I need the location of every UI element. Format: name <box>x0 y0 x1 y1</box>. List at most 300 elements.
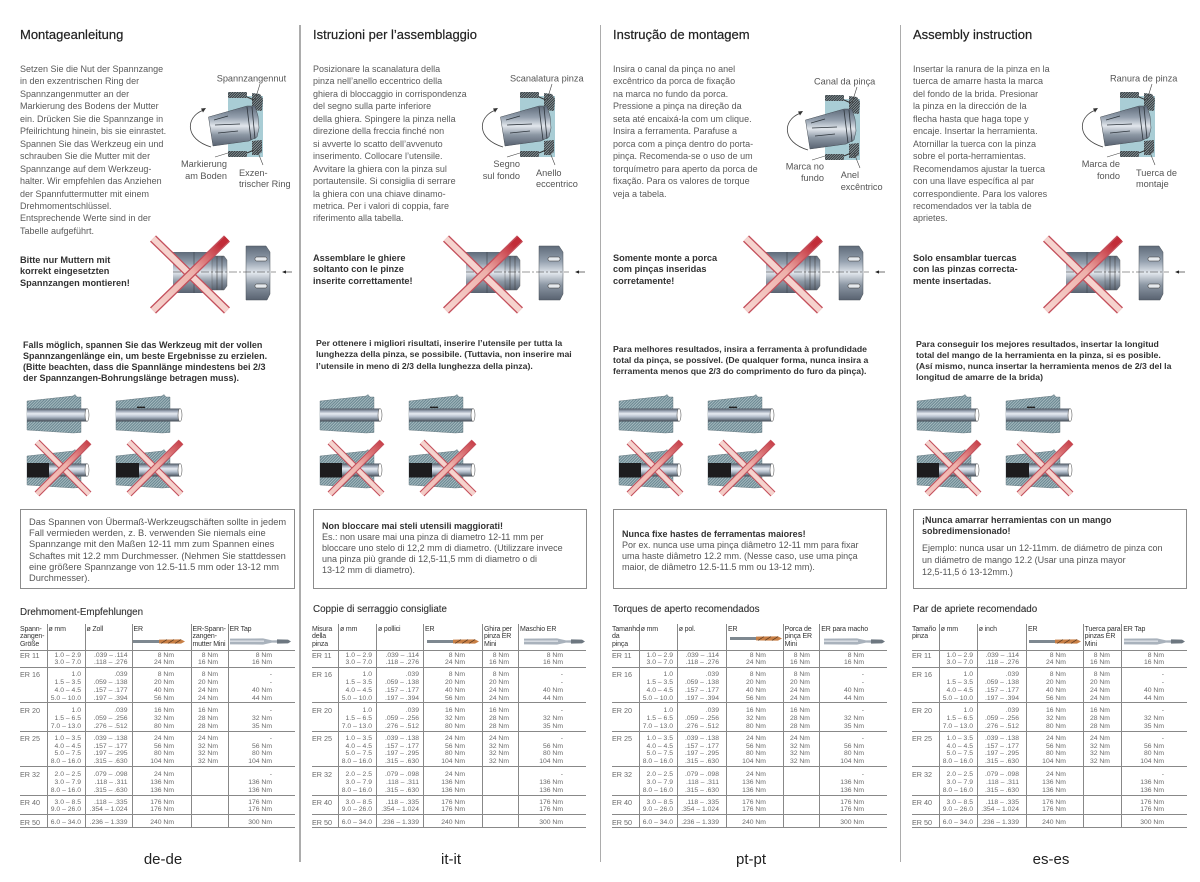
text block: instructions: pinça. Recomenda-se o uso de um <box>613 151 753 161</box>
warning text: soltanto con le pinze <box>313 264 404 274</box>
text block: instructions: Avvitare la ghiera con la pinza sul <box>313 164 447 174</box>
table: torque recommendations: 24 Nm <box>790 695 810 702</box>
table: torque recommendations: 1.5 – 6.5 <box>647 715 673 722</box>
table: torque recommendations: 24 Nm <box>198 687 218 694</box>
table: torque recommendations: 136 Nm <box>150 787 174 794</box>
illustration: collet in nut with labels: Markierung <box>181 159 227 169</box>
illustration: collet sections, correct and crossed out <box>320 394 476 496</box>
table: torque recommendations: 32 Nm <box>198 743 218 750</box>
text block: clamping length note: total da pinça, se possível. (De qualquer forma, nunca insira a <box>613 355 868 365</box>
table: torque recommendations: - <box>862 735 864 742</box>
table: torque recommendations: 8.0 – 16.0 <box>943 787 973 794</box>
table: torque recommendations: ER para macho <box>821 626 868 632</box>
table: torque recommendations: 8 Nm <box>750 671 766 678</box>
table: torque recommendations: ER 25 <box>20 734 40 743</box>
text block: instructions: Spannen Sie das Werkzeug ein und <box>20 139 163 149</box>
table: torque recommendations <box>312 624 586 828</box>
table: torque recommendations: 8.0 – 16.0 <box>51 787 81 794</box>
text block: clamping length note: Spannzangenlänge ein, um beste Ergebnisse zu erzielen. <box>23 351 267 361</box>
table: torque recommendations: - <box>1162 707 1164 714</box>
table: torque recommendations: ER 32 <box>20 770 40 779</box>
table: torque recommendations: 16 Nm <box>790 707 810 714</box>
table: torque recommendations: 1.5 – 6.5 <box>947 715 973 722</box>
table: torque recommendations: 1.0 <box>664 707 673 714</box>
table: torque recommendations: 1.5 – 6.5 <box>346 715 372 722</box>
table: torque recommendations: ER 40 <box>612 798 632 807</box>
panel: de-de <box>20 27 295 868</box>
table: torque recommendations: 24 Nm <box>489 735 509 742</box>
table: torque recommendations: 3.0 – 7.9 <box>947 779 973 786</box>
table: torque recommendations: ER 50 <box>312 818 332 827</box>
callout box: oversized shanks: Das Spannen von Übermaß-Werkzeugschäften sollte in jedem <box>29 517 286 527</box>
text block: instructions: torquímetro para aperto da porca de <box>613 164 758 174</box>
table: torque recommendations: 24 Nm <box>746 659 766 666</box>
table: torque recommendations: ER 16 <box>912 670 932 679</box>
text block: clamping length note: Para conseguir los mejores resultados, insertar la longitud <box>916 338 1159 348</box>
table: torque recommendations: .059 – .256 <box>93 715 128 722</box>
table: torque recommendations: 40 Nm <box>1046 687 1066 694</box>
table: torque recommendations <box>20 624 295 828</box>
table: torque recommendations: .157 – .177 <box>685 743 719 750</box>
table: torque recommendations: Porca de <box>785 626 812 632</box>
table: torque recommendations: 176 Nm <box>742 806 766 813</box>
table: torque recommendations: Mini <box>484 641 496 648</box>
table: torque recommendations: 8 Nm <box>493 671 509 678</box>
table: torque recommendations: 8 Nm <box>848 652 864 659</box>
icon: tap <box>524 638 585 645</box>
table: torque recommendations: ER 20 <box>20 706 40 715</box>
table: torque recommendations: 300 Nm <box>840 819 864 826</box>
table: torque recommendations: 8 Nm <box>750 652 766 659</box>
illustration: collet in nut with labels: Tuerca de <box>1136 168 1177 178</box>
table: torque recommendations: .118 – .311 <box>386 779 419 786</box>
table: torque recommendations: .236 – 1.339 <box>981 819 1019 826</box>
table: torque recommendations: 9.0 – 26.0 <box>342 806 372 813</box>
table: torque recommendations: .059 – .138 <box>93 679 128 686</box>
table: torque recommendations: Ghira per <box>484 626 512 632</box>
table: torque recommendations: 1.0 <box>363 707 372 714</box>
table: torque recommendations: 80 Nm <box>543 750 563 757</box>
table: torque recommendations: 16 Nm <box>746 707 766 714</box>
table: torque recommendations: 24 Nm <box>746 771 766 778</box>
table: torque recommendations: Tamaño <box>912 626 936 632</box>
table: torque recommendations: 28 Nm <box>198 715 218 722</box>
text block: instructions: veja a tabela. <box>613 189 667 199</box>
table: torque recommendations: .276 – .512 <box>985 723 1019 730</box>
table: torque recommendations: 1.5 – 3.5 <box>647 679 673 686</box>
table: torque recommendations: ER 40 <box>312 798 332 807</box>
text block: clamping length note: Para melhores resultados, insira a ferramenta à profundidade <box>613 344 867 354</box>
table: torque recommendations: 104 Nm <box>1042 758 1066 765</box>
callout box: oversized shanks: eine größere Spannzange von 12.5-11.5 mm oder 13-12 mm <box>29 562 279 572</box>
table: torque recommendations: 104 Nm <box>742 758 766 765</box>
table: torque recommendations: 3.0 – 7.9 <box>346 779 372 786</box>
table: torque recommendations: Misura <box>312 626 332 632</box>
table: torque recommendations: .118 – .335 <box>385 799 419 806</box>
table: torque recommendations: pinza ER <box>484 633 511 640</box>
table: torque recommendations: pinza <box>312 641 328 648</box>
table: torque recommendations: ER 11 <box>912 651 931 660</box>
text block: instructions: excêntrico da porca de fixação <box>613 76 735 86</box>
table: torque recommendations: 5.0 – 7.5 <box>947 750 973 757</box>
table: torque recommendations: .039 <box>114 671 128 678</box>
table: torque recommendations: 136 Nm <box>1140 787 1164 794</box>
table: torque recommendations: 104 Nm <box>441 758 465 765</box>
table: torque recommendations: 28 Nm <box>489 715 509 722</box>
table: torque recommendations: 240 Nm <box>742 819 766 826</box>
table: torque recommendations: ER 25 <box>912 734 932 743</box>
callout box: oversized shanks: Por ex. nunca use uma pinça diâmetro 12-11 mm para fixar <box>622 540 858 550</box>
table: torque recommendations: 176 Nm <box>840 799 864 806</box>
text block: instructions: Posizionare la scanalatura della <box>313 64 440 74</box>
callout box: oversized shanks: ¡Nunca amarrar herramientas con un mango <box>922 514 1112 524</box>
table: torque recommendations: 136 Nm <box>150 779 174 786</box>
table: torque recommendations: 5.0 – 10.0 <box>943 695 973 702</box>
table: torque recommendations: 20 Nm <box>154 679 174 686</box>
table: torque recommendations: 300 Nm <box>539 819 563 826</box>
table: torque recommendations: pinzas ER <box>1085 633 1115 640</box>
table: torque recommendations: ER 20 <box>612 706 632 715</box>
table: torque recommendations: 32 Nm <box>1090 758 1110 765</box>
table: torque recommendations: 44 Nm <box>1144 695 1164 702</box>
table: torque recommendations: .039 <box>706 671 719 678</box>
illustration: collet in nut with labels <box>482 74 584 189</box>
table: torque recommendations: .039 <box>406 671 419 678</box>
table: torque recommendations: ER 16 <box>612 670 632 679</box>
table: torque recommendations: 24 Nm <box>445 659 465 666</box>
table: torque recommendations: mutter Mini <box>192 641 225 648</box>
table: torque recommendations: Tuerca para <box>1085 626 1121 632</box>
table: torque recommendations: .315 – .630 <box>93 758 128 765</box>
table: torque recommendations: 176 Nm <box>1042 799 1066 806</box>
table: torque recommendations: 24 Nm <box>445 735 465 742</box>
table: torque recommendations: 4.0 – 4.5 <box>346 743 372 750</box>
table: torque recommendations: .079 – .098 <box>385 771 419 778</box>
table: torque recommendations: 2.0 – 2.5 <box>947 771 973 778</box>
table: torque recommendations: 40 Nm <box>746 687 766 694</box>
table: torque recommendations: - <box>1162 771 1164 778</box>
table: torque recommendations: ER 25 <box>312 734 332 743</box>
table: torque recommendations: 1.0 <box>363 671 372 678</box>
text block: clamping length note: total del mango de la herramienta en la pinza, si es posible. <box>916 350 1161 360</box>
table: torque recommendations: 176 Nm <box>441 799 465 806</box>
callout box: oversized shanks: uma haste diâmetro 12.2 mm. (Nesse caso, use uma pinça <box>622 551 858 561</box>
text block: instructions: la pinza en la dirección de la <box>913 101 1027 111</box>
heading: torque table: Torques de aperto recomendados <box>613 604 760 615</box>
illustration: collet in nut with labels: Marca de <box>1082 159 1120 169</box>
text block: instructions: flecha hasta que haga tope y <box>913 114 1029 124</box>
table: torque recommendations: - <box>862 679 864 686</box>
table: torque recommendations: - <box>1162 735 1164 742</box>
illustration: collet sections, correct and crossed out <box>618 394 776 496</box>
table: torque recommendations: 24 Nm <box>154 771 174 778</box>
table: torque recommendations: - <box>270 771 272 778</box>
warning text: inserite correttamente! <box>313 276 413 286</box>
table: torque recommendations: 8 Nm <box>1050 671 1066 678</box>
table: torque recommendations: 32 Nm <box>790 743 810 750</box>
title: Istruzioni per l'assemblaggio: Istruzioni per l’assemblaggio <box>313 27 477 42</box>
table: torque recommendations: 176 Nm <box>742 799 766 806</box>
table: torque recommendations: 32 Nm <box>154 715 174 722</box>
callout box: oversized shanks: Fall vermieden werden, z. B. verwenden Sie niemals eine <box>29 528 266 538</box>
table: torque recommendations: 5.0 – 10.0 <box>51 695 81 702</box>
warning text: Bitte nur Muttern mit <box>20 255 110 265</box>
text block: clamping length note <box>316 338 572 371</box>
table: torque recommendations: .315 – .630 <box>385 787 419 794</box>
text block: instructions: Insira a ferramenta. Parafuse a <box>613 126 737 136</box>
text block: instructions: Atornillar la tuerca con la pinza <box>913 139 1036 149</box>
table: torque recommendations: 104 Nm <box>1140 758 1164 765</box>
table: torque recommendations: .118 – .276 <box>385 659 419 666</box>
table: torque recommendations: ER 20 <box>912 706 932 715</box>
table: torque recommendations: 80 Nm <box>154 723 174 730</box>
table: torque recommendations: - <box>561 735 563 742</box>
text block: clamping length note <box>23 340 267 383</box>
table: torque recommendations: 24 Nm <box>154 659 174 666</box>
illustration: collet in nut with labels: sul fondo <box>483 171 520 181</box>
table: torque recommendations: 56 Nm <box>1046 743 1066 750</box>
table: torque recommendations: 24 Nm <box>1046 771 1066 778</box>
table: torque recommendations: .118 – .311 <box>94 779 128 786</box>
table: torque recommendations: 80 Nm <box>1144 750 1164 757</box>
text block: instructions: Pressione a pinça na direção da <box>613 101 742 111</box>
text block: instructions: si avverte lo scatto dell’avvenuto <box>313 139 443 149</box>
table: torque recommendations: 2.0 – 2.5 <box>346 771 372 778</box>
table: torque recommendations: 32 Nm <box>746 715 766 722</box>
table: torque recommendations: ø pollici <box>378 626 400 632</box>
text block: clamping length note: (Bitte beachten, dass die Spannlänge mindestens bei 2/3 <box>23 362 266 372</box>
table: torque recommendations: 24 Nm <box>1090 735 1110 742</box>
table: torque recommendations: 1.5 – 6.5 <box>55 715 81 722</box>
text block: instructions: schrauben Sie die Mutter mit der <box>20 151 150 161</box>
table: torque recommendations: 4.0 – 4.5 <box>346 687 372 694</box>
table: torque recommendations: 136 Nm <box>539 779 563 786</box>
table: torque recommendations: .276 – .512 <box>93 723 128 730</box>
table: torque recommendations: 44 Nm <box>252 695 272 702</box>
illustration: collet in nut with labels: Anello <box>536 168 562 178</box>
text block: instructions: encaje. Insertar la herramienta. <box>913 126 1038 136</box>
text block: instructions: Entsprechende Werte sind in der <box>20 213 151 223</box>
language code: es-es <box>1033 851 1069 868</box>
table: torque recommendations: 8 Nm <box>449 652 465 659</box>
table: torque recommendations: Mini <box>785 641 797 648</box>
table: torque recommendations: Tamanho <box>612 626 640 632</box>
table: torque recommendations: .039 <box>114 707 128 714</box>
table: torque recommendations: 32 Nm <box>1090 743 1110 750</box>
icon: drill <box>730 636 782 641</box>
table: torque recommendations: .354 – 1.024 <box>90 806 128 813</box>
illustration: collet in nut with labels: Exzen- <box>239 168 268 178</box>
table: torque recommendations: 24 Nm <box>489 687 509 694</box>
table: torque recommendations: 1.0 – 2.9 <box>346 652 372 659</box>
table: torque recommendations: ER-Spann- <box>192 626 226 632</box>
table: torque recommendations: .197 – .295 <box>385 750 419 757</box>
table: torque recommendations: 24 Nm <box>1090 687 1110 694</box>
table: torque recommendations: 240 Nm <box>150 819 174 826</box>
table: torque recommendations: 32 Nm <box>445 715 465 722</box>
table: torque recommendations: 136 Nm <box>441 787 465 794</box>
table: torque recommendations: .315 – .630 <box>685 787 719 794</box>
table: torque recommendations: 80 Nm <box>844 750 864 757</box>
warning text <box>313 253 413 286</box>
table: torque recommendations: 44 Nm <box>543 695 563 702</box>
table: torque recommendations: 32 Nm <box>790 758 810 765</box>
table: torque recommendations: ø mm <box>641 626 658 632</box>
table: torque recommendations: 28 Nm <box>198 723 218 730</box>
table: torque recommendations: 1.0 <box>664 671 673 678</box>
table: torque recommendations: 176 Nm <box>840 806 864 813</box>
panel: es-es <box>912 27 1187 868</box>
table: torque recommendations: .039 <box>406 707 419 714</box>
table: torque recommendations: 9.0 – 26.0 <box>943 806 973 813</box>
table: torque recommendations: 32 Nm <box>198 750 218 757</box>
table: torque recommendations: 16 Nm <box>543 659 563 666</box>
icon: drill <box>133 639 185 644</box>
table: torque recommendations: 176 Nm <box>1140 806 1164 813</box>
table: torque recommendations: 104 Nm <box>150 758 174 765</box>
callout box: oversized shanks: Schaftes mit 12.2 mm Durchmesser. (Nehmen Sie stattdessen <box>29 550 286 560</box>
table: torque recommendations: ER <box>425 626 434 632</box>
table: torque recommendations: .197 – .295 <box>685 750 719 757</box>
callout box: oversized shanks: Es.: non usare mai una pinza di diametro 12-11 mm per <box>322 532 543 542</box>
table: torque recommendations: 56 Nm <box>445 695 465 702</box>
table: torque recommendations: 16 Nm <box>844 659 864 666</box>
table: torque recommendations: .059 – .256 <box>385 715 419 722</box>
table: torque recommendations: 136 Nm <box>441 779 465 786</box>
text block: clamping length note: ferramenta menos que 2/3 do comprimento do furo da pinça). <box>613 366 866 376</box>
callout box: oversized shanks: un diámetro de mango 12.2 (Usar una pinza mayor <box>922 555 1126 565</box>
table: torque recommendations: ø Zoll <box>86 626 103 632</box>
table: torque recommendations: 136 Nm <box>742 779 766 786</box>
table: torque recommendations: 28 Nm <box>489 723 509 730</box>
table: torque recommendations: 9.0 – 26.0 <box>643 806 673 813</box>
table: torque recommendations: 5.0 – 7.5 <box>55 750 81 757</box>
table: torque recommendations: 20 Nm <box>1046 679 1066 686</box>
table: torque recommendations: - <box>1162 679 1164 686</box>
table: torque recommendations: 5.0 – 7.5 <box>346 750 372 757</box>
table: torque recommendations: .118 – .276 <box>985 659 1019 666</box>
table: torque recommendations: 16 Nm <box>1090 659 1110 666</box>
text block: instructions <box>913 64 1050 223</box>
table: torque recommendations: 240 Nm <box>441 819 465 826</box>
table: torque recommendations: 56 Nm <box>543 743 563 750</box>
text block: instructions: riferimento alla tabella. <box>313 213 404 223</box>
table: torque recommendations: 24 Nm <box>198 735 218 742</box>
table: torque recommendations: pinça <box>612 641 628 648</box>
table: torque recommendations: .039 <box>706 707 719 714</box>
table: torque recommendations: 8 Nm <box>1094 671 1110 678</box>
table: torque recommendations: .354 – 1.024 <box>681 806 719 813</box>
icon: drill <box>1029 639 1081 644</box>
text block: instructions: direzione della freccia finché non <box>313 126 444 136</box>
callout box: oversized shanks: Nunca fixe hastes de ferramentas maiores! <box>622 528 806 538</box>
table: torque recommendations: .118 – .335 <box>685 799 719 806</box>
icon: tap <box>230 638 291 645</box>
table: torque recommendations: 3.0 – 7.0 <box>647 659 673 666</box>
table: torque recommendations: ER 11 <box>612 651 631 660</box>
illustration: collet in nut with labels: eccentrico <box>536 179 578 189</box>
table: torque recommendations: 136 Nm <box>1042 787 1066 794</box>
table: torque recommendations: 56 Nm <box>1144 743 1164 750</box>
table: torque recommendations: 1.5 – 3.5 <box>346 679 372 686</box>
table: torque recommendations: 136 Nm <box>840 779 864 786</box>
table: torque recommendations: - <box>270 671 272 678</box>
table: torque recommendations: .118 – .276 <box>685 659 719 666</box>
table: torque recommendations: 176 Nm <box>150 806 174 813</box>
table: torque recommendations: - <box>561 671 563 678</box>
table: torque recommendations: ER 40 <box>912 798 932 807</box>
table: torque recommendations: .039 – .114 <box>385 652 419 659</box>
text block: instructions: na marca no fundo da porca. <box>613 89 728 99</box>
table: torque recommendations: .118 – .276 <box>94 659 128 666</box>
table: torque recommendations: 7.0 – 13.0 <box>943 723 973 730</box>
table: torque recommendations: 44 Nm <box>844 695 864 702</box>
text block: clamping length note: der Spannzangen-Bohrungslänge betragen muss). <box>23 373 239 383</box>
table: torque recommendations: 32 Nm <box>489 750 509 757</box>
illustration: collet in nut with labels <box>181 74 291 189</box>
table: torque recommendations: .157 – .177 <box>385 743 419 750</box>
table: torque recommendations: .157 – .177 <box>93 687 128 694</box>
text block: instructions: in den exzentrischen Ring der <box>20 76 139 86</box>
table: torque recommendations: .197 – .394 <box>385 695 419 702</box>
warning text: Assemblare le ghiere <box>313 253 405 263</box>
illustration: collet sections, correct and crossed out <box>26 394 184 496</box>
table: torque recommendations: pinça ER <box>785 633 812 640</box>
illustration: collet in nut with labels: am Boden <box>185 171 227 181</box>
table: torque recommendations: 24 Nm <box>1090 695 1110 702</box>
table: torque recommendations: 8.0 – 16.0 <box>342 758 372 765</box>
table: torque recommendations: 16 Nm <box>154 707 174 714</box>
table: torque recommendations: ø mm <box>941 626 958 632</box>
table: torque recommendations: 136 Nm <box>1140 779 1164 786</box>
table: torque recommendations: .197 – .394 <box>985 695 1019 702</box>
table: torque recommendations: .039 – .138 <box>93 735 128 742</box>
table: torque recommendations: .236 – 1.339 <box>381 819 419 826</box>
illustration: collet in nut with labels: montaje <box>1136 179 1169 189</box>
table: torque recommendations: 20 Nm <box>198 679 218 686</box>
table: torque recommendations: 24 Nm <box>489 695 509 702</box>
illustration: crossed-out collet and nut <box>150 236 292 314</box>
table: torque recommendations: 32 Nm <box>489 743 509 750</box>
table: torque recommendations: .079 – .098 <box>985 771 1019 778</box>
text block: instructions: Insertar la ranura de la pinza en la <box>913 64 1050 74</box>
table: torque recommendations: - <box>270 679 272 686</box>
table: torque recommendations: Spann- <box>20 626 42 632</box>
warning text: com pinças inseridas <box>613 264 706 274</box>
text block: instructions: Recomendamos ajustar la tuerca <box>913 164 1045 174</box>
text block: instructions: inserimento. Collocare l’utensile. <box>313 151 443 161</box>
table: torque recommendations: 24 Nm <box>1046 659 1066 666</box>
table: torque recommendations: 2.0 – 2.5 <box>55 771 81 778</box>
table: torque recommendations: 8 Nm <box>794 652 810 659</box>
table: torque recommendations: 1.0 – 3.5 <box>647 735 673 742</box>
table: torque recommendations: 16 Nm <box>1090 707 1110 714</box>
illustration: collet in nut with labels: Spannzangennut <box>217 74 287 84</box>
illustration: crossed-out collet and nut <box>1043 236 1185 314</box>
table: torque recommendations: 56 Nm <box>746 743 766 750</box>
table: torque recommendations: 32 Nm <box>1090 750 1110 757</box>
heading: torque table: Coppie di serraggio consigliate <box>313 604 447 615</box>
text block: instructions <box>20 64 166 236</box>
illustration: collet in nut with labels: fundo <box>801 173 824 183</box>
text block: instructions: pinza nell’anello eccentrico della <box>313 76 442 86</box>
table: torque recommendations: 240 Nm <box>1042 819 1066 826</box>
table: torque recommendations: ER 50 <box>612 818 632 827</box>
table: torque recommendations: .039 – .138 <box>685 735 719 742</box>
text block: instructions: ghiera di bloccaggio in corrispondenza <box>313 89 467 99</box>
table: torque recommendations: 7.0 – 13.0 <box>51 723 81 730</box>
warning text: Solo ensamblar tuercas <box>913 253 1017 263</box>
